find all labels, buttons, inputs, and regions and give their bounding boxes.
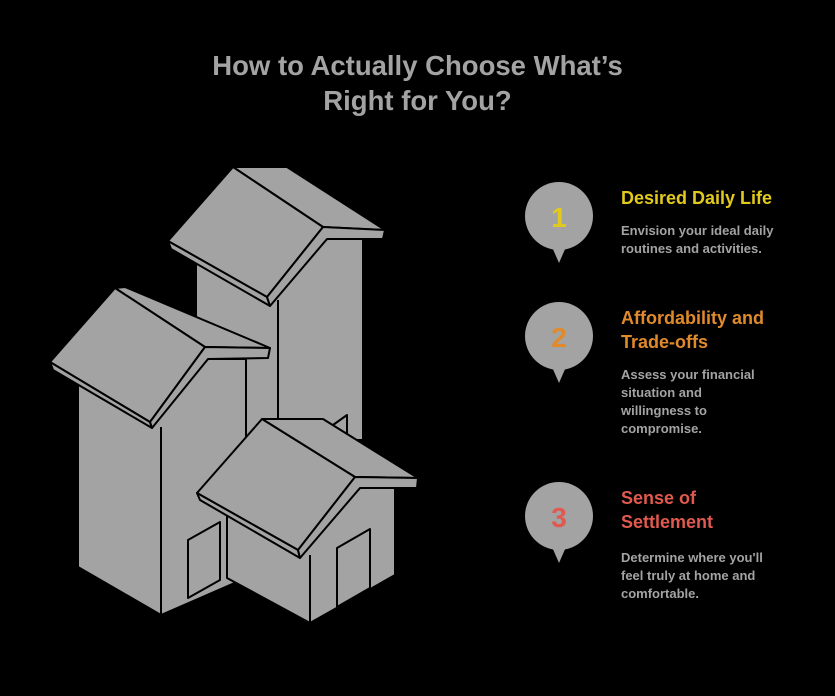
- title: [212, 50, 623, 116]
- text 2: [621, 367, 755, 436]
- heading 2: Trade-offs: [621, 332, 708, 352]
- text 2: willingness to: [621, 403, 707, 418]
- text 2: compromise.: [621, 421, 702, 436]
- small house: [197, 415, 418, 623]
- tall back building: [168, 167, 385, 440]
- heading 2: [621, 308, 764, 352]
- text 1: Envision your ideal daily: [621, 223, 773, 238]
- icon: marker 2: [525, 302, 593, 383]
- icon: marker 3: 3: [551, 502, 567, 533]
- icon: marker 2: 2: [551, 322, 567, 353]
- text 3: Determine where you'll: [621, 550, 763, 565]
- text 3: [621, 550, 763, 601]
- text 3: feel truly at home and: [621, 568, 755, 583]
- text 2: situation and: [621, 385, 702, 400]
- heading 1: Desired Daily Life: [621, 188, 772, 208]
- text 1: [621, 223, 774, 256]
- text 3: comfortable.: [621, 586, 699, 601]
- left building: [50, 287, 270, 615]
- icon: marker 1: [525, 182, 593, 263]
- heading 3: Sense of: [621, 488, 696, 508]
- title: Right for You?: [323, 85, 512, 116]
- icon: marker 1: 1: [551, 202, 567, 233]
- title: How to Actually Choose What’s: [212, 50, 623, 81]
- heading 2: Affordability and: [621, 308, 764, 328]
- text 1: routines and activities.: [621, 241, 762, 256]
- text 2: Assess your financial: [621, 367, 755, 382]
- heading 3: Settlement: [621, 512, 713, 532]
- icon: marker 3: [525, 482, 593, 563]
- heading 3: [621, 488, 713, 532]
